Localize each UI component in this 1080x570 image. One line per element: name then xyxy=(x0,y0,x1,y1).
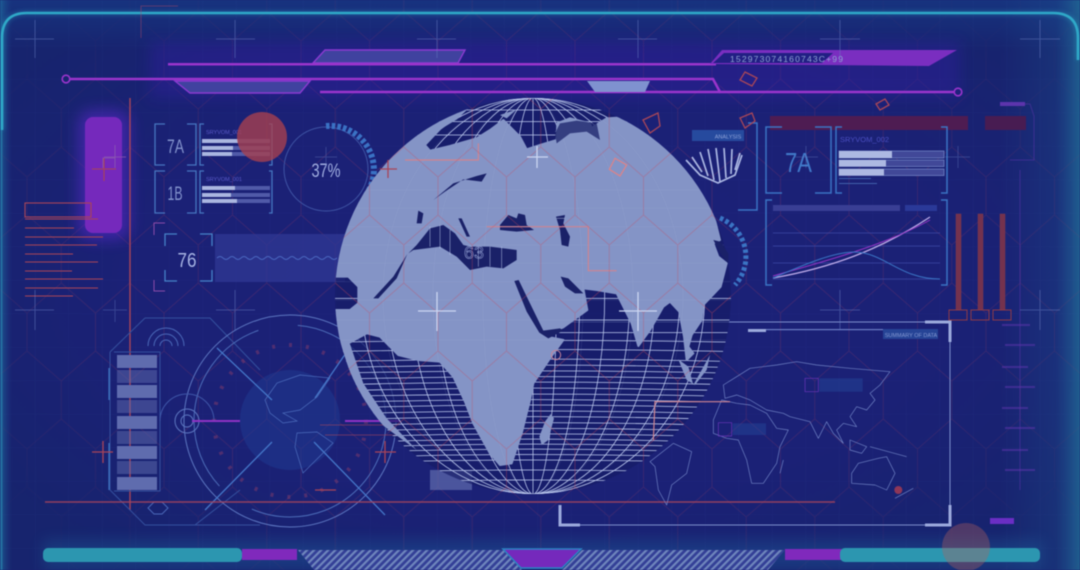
left purple pill and red notes xyxy=(25,98,130,510)
frame label xyxy=(883,329,938,339)
Persian Gulf xyxy=(561,277,583,293)
Black Sea xyxy=(500,213,534,232)
lower-left crescent xyxy=(338,337,417,450)
frame xyxy=(560,322,950,525)
pill xyxy=(85,117,122,233)
serial number: 152973074160743C+99 xyxy=(730,54,843,64)
small seas xyxy=(417,211,470,237)
right hatched segment xyxy=(562,550,785,570)
ocean with wireframe xyxy=(330,98,740,494)
lower-right crescent xyxy=(640,408,710,464)
arch icon xyxy=(148,328,184,346)
sea wireframe xyxy=(430,218,565,268)
left purple segment xyxy=(242,549,297,560)
list rows xyxy=(117,355,157,490)
bottom status bar xyxy=(43,540,1043,570)
red baseline xyxy=(45,501,835,503)
faint red circle bottom right xyxy=(942,523,990,570)
hex node xyxy=(148,502,168,514)
Caspian Sea xyxy=(556,215,570,247)
octagonal list panel xyxy=(109,318,260,525)
right cyan segment xyxy=(840,548,1040,562)
Mediterranean xyxy=(408,225,517,270)
data panel 1B: 1B xyxy=(168,184,182,205)
Gibraltar strip xyxy=(373,254,407,298)
right purple segment xyxy=(785,549,843,560)
dark red header bars xyxy=(770,116,968,130)
left cyan segment xyxy=(43,548,242,562)
data panel 1B xyxy=(155,171,272,213)
DNA helix with label xyxy=(686,130,744,183)
right data panel 7A: 7A xyxy=(785,147,812,178)
data panel 7A: SRYVOM_001 xyxy=(206,130,242,136)
data panel 1B: SRYVOM_001 xyxy=(206,177,242,183)
upper parallelogram xyxy=(313,50,465,63)
Sumatra and islands xyxy=(678,355,710,385)
bars xyxy=(200,124,272,165)
data panel 7A xyxy=(155,124,272,165)
right data tab xyxy=(710,50,957,66)
line chart panel xyxy=(766,200,947,285)
hexagon overlay on globe xyxy=(335,98,731,494)
right data panel 7A: SRYVOM_002 xyxy=(840,135,889,144)
crosshair markers xyxy=(15,20,1060,490)
world map outline xyxy=(650,362,913,505)
gauge 37%: 37% xyxy=(312,161,341,182)
bell curve xyxy=(773,252,940,279)
land grid xyxy=(336,112,730,478)
floating diamonds xyxy=(643,72,889,133)
Madagascar xyxy=(539,414,554,445)
DNA helix with label: ANALYSIS xyxy=(715,134,742,140)
radar with Americas xyxy=(160,315,472,527)
data panel 7A: 7A xyxy=(167,137,184,158)
continents: Europe, Asia, Africa xyxy=(330,90,740,465)
inland seas xyxy=(373,121,728,338)
upper line xyxy=(168,63,716,66)
centre magenta trapezoid xyxy=(503,549,581,568)
thermometers xyxy=(949,214,1011,320)
world map frame: SUMMARY OF DATA xyxy=(885,333,938,339)
red circle xyxy=(237,112,287,162)
right purple tick column xyxy=(990,104,1035,524)
faint number 63: 63 xyxy=(464,242,484,262)
red circuit trace xyxy=(405,143,730,440)
red notes xyxy=(25,98,130,510)
readout 76 with waveform: 76 xyxy=(178,250,196,272)
lower line with node xyxy=(62,75,962,96)
readout 76 with waveform xyxy=(154,223,345,291)
right data panel 7A xyxy=(738,116,1026,210)
left hatched segment xyxy=(298,550,522,570)
right tick gauge xyxy=(720,218,746,285)
lower parallelogram xyxy=(175,81,310,93)
world map frame xyxy=(560,322,950,525)
gauge 37% xyxy=(284,126,374,211)
top magenta header lines xyxy=(62,42,962,98)
rising curve xyxy=(773,217,930,278)
bracket box xyxy=(155,124,196,165)
highlighted segment xyxy=(587,81,650,92)
Baltic Sea xyxy=(433,173,487,200)
Red Sea xyxy=(514,280,563,338)
red diamond xyxy=(609,158,627,176)
globe xyxy=(330,90,740,494)
